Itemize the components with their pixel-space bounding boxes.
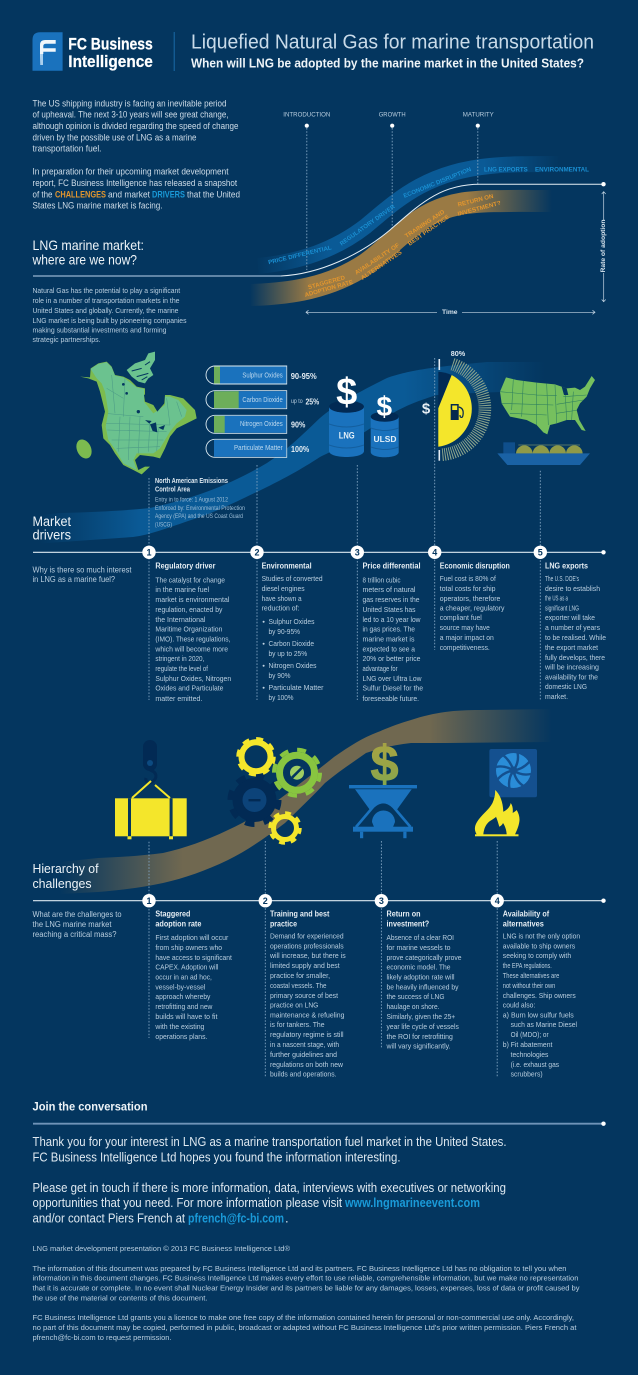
column: training and best practice: limited supply and best: [270, 961, 340, 970]
column: economic disruption: operators, therefore: [440, 594, 500, 603]
column: environmental: by 90%: [268, 671, 291, 680]
column: training and best practice: will increase, but there is: [269, 951, 346, 960]
column: economic disruption: Economic disruption: [440, 562, 510, 570]
intro text: of upheaval. The next 3-10 years will see great change,: [32, 110, 228, 120]
column: regulatory driver: stringent in 2020,: [155, 654, 204, 663]
legal text: [32, 1244, 580, 1342]
emissions control area note: (USCG): [155, 522, 172, 528]
icon: gears: [230, 739, 320, 843]
intro text: report, FC Business Intelligence has released a snapshot: [32, 178, 238, 188]
column: availability of alternatives: LNG is not the only option: [503, 932, 580, 940]
column: LNG exports: LNG exports: [545, 562, 588, 570]
flame: [475, 790, 520, 836]
column: price differential: United States has: [362, 605, 416, 614]
LNG barrel: [329, 372, 364, 457]
column: LNG exports: a number of years: [545, 623, 600, 632]
column: training and best practice: Training and best: [270, 910, 330, 918]
column: environmental: Nitrogen Oxides: [268, 661, 317, 670]
column: staggered adoption rate: First adoption will occur: [155, 933, 229, 942]
column: price differential: meters of natural: [362, 585, 416, 594]
column: return on investment: Return on: [386, 910, 421, 918]
number 1: [142, 894, 156, 907]
intro text: although opinion is divided regarding the speed of change: [32, 121, 238, 131]
column: return on investment: for marine vessels to: [386, 943, 450, 952]
challenge labels: TRAINING AND: [404, 209, 447, 240]
challenges heading: challenges: [32, 876, 92, 891]
column: staggered adoption rate: Staggered: [155, 910, 190, 918]
stage markers: [283, 112, 494, 270]
column: environmental: have shown a: [262, 594, 302, 603]
header: [32, 31, 594, 71]
challenges question: What are the challenges to: [32, 910, 122, 919]
title: Liquefied Natural Gas for marine transportation: [191, 31, 594, 53]
column: training and best practice: maintenance & refueling: [270, 1010, 344, 1020]
column: environmental: diesel engines: [262, 584, 305, 593]
column: staggered adoption rate: [154, 910, 233, 1041]
market drivers question: Why is there so much interest: [32, 564, 132, 574]
column: price differential: Price differential: [362, 562, 420, 570]
column: environmental: by up to 25%: [268, 649, 307, 658]
icon: north america map: [73, 352, 197, 474]
column: LNG exports: fully develops, there: [545, 653, 605, 662]
column: environmental: Sulphur Oxides: [268, 617, 315, 626]
legal text: FC Business Intelligence Ltd grants you a licence to make one free copy of the information contained herein for personal or non-commercial use only. Accordingly,: [32, 1313, 574, 1322]
heading: where are we now: [32, 237, 144, 268]
column: availability of alternatives: [503, 910, 580, 1078]
number 2: 2: [254, 548, 260, 558]
blue drivers band: [258, 164, 560, 266]
column: staggered adoption rate: operations plans.: [155, 1032, 207, 1041]
column: regulatory driver: regulation, enacted by: [155, 605, 223, 614]
column: staggered adoption rate: adoption rate: [155, 920, 202, 928]
ULSD barrel: [371, 391, 399, 457]
hawaii: [73, 437, 95, 461]
market drivers timeline: [33, 358, 606, 700]
thank you text: FC Business Intelligence Ltd hopes you found the information interesting.: [32, 1150, 400, 1164]
column: return on investment: [386, 910, 462, 1050]
bar: nitrogen oxides: Nitrogen Oxides: [240, 421, 283, 428]
challenges band: [60, 709, 553, 894]
column: LNG exports: the US as a: [545, 594, 568, 602]
logo: Intelligence: [68, 52, 153, 71]
column: economic disruption: total costs for ship: [440, 584, 496, 593]
column: staggered adoption rate: have access to significant: [155, 953, 233, 962]
challenges timeline: [33, 841, 606, 1077]
column: training and best practice: practice: [270, 920, 297, 928]
thank you text: [32, 1134, 506, 1226]
column: return on investment: investment?: [386, 920, 429, 928]
column: training and best practice: coastal vessels. The: [270, 981, 326, 990]
challenge labels: ADOPTION RATE: [304, 280, 354, 299]
column: return on investment: haulage on shore.: [386, 1002, 440, 1011]
bar: particulate matter: Particulate Matter: [234, 445, 283, 452]
bar: sulphur oxides: Sulphur Oxides: [242, 372, 283, 380]
driver labels: REGULATORY DRIVER: [339, 204, 397, 247]
column: LNG exports: market.: [545, 692, 568, 701]
column: availability of alternatives: These alternatives are: [503, 971, 559, 980]
column: availability of alternatives: could also:: [503, 1000, 535, 1010]
column: availability of alternatives: available to ship owners: [503, 942, 575, 950]
bar: carbon dioxide: [206, 391, 320, 409]
column: availability of alternatives: challenges. Ship owners: [503, 991, 576, 1000]
intro text: DRIVERS: [152, 189, 185, 199]
column: price differential: expected to see a: [362, 644, 416, 654]
natural gas paragraph: United States and globally. Currently, the marine: [32, 306, 178, 315]
join the conversation heading: [32, 1100, 606, 1126]
column: training and best practice: regulatory regime is still: [270, 1030, 344, 1039]
column: economic disruption: a major impact on: [440, 633, 494, 642]
number 1: 1: [146, 896, 152, 906]
column: environmental: [262, 562, 324, 702]
icon: dollar funnel: [349, 736, 417, 838]
column: price differential: marine market is: [362, 634, 415, 644]
adoption curve chart: [33, 112, 607, 316]
number 3: 3: [355, 548, 360, 558]
column: LNG exports: to be realised. While: [545, 633, 606, 642]
natural gas paragraph: [32, 286, 187, 344]
number 1: [142, 546, 156, 559]
intro text: and market: [108, 189, 150, 199]
column: environmental: by 90-95%: [268, 627, 300, 636]
stage markers: INTRODUCTION: [283, 112, 330, 118]
emissions control area note: Enforced by: Environmental Protection: [155, 505, 245, 512]
thank you text: and/or contact Piers French at: [32, 1210, 185, 1226]
market drivers question: [32, 564, 132, 584]
natural gas paragraph: LNG market is being built by pioneering companies: [32, 316, 187, 325]
column: return on investment: year life cycle of vessels: [386, 1022, 459, 1031]
number 2: [259, 894, 272, 907]
market drivers band: [33, 362, 555, 544]
column: training and best practice: in a nascent stage, with: [270, 1040, 339, 1049]
driver labels: ECONOMIC DISRUPTION: [403, 167, 472, 200]
column: return on investment: prove categorically prove: [386, 953, 462, 962]
column: LNG exports: exporter will take: [545, 613, 595, 622]
intro text: States LNG marine market is facing.: [32, 201, 162, 211]
emissions control area note: Agency (EPA) and the US Coast Guard: [155, 513, 243, 520]
adoption line: [33, 182, 606, 276]
LNG barrel: $: [336, 372, 357, 414]
number 3: [375, 894, 388, 907]
bar: nitrogen oxides: 90%: [291, 420, 306, 430]
icon: dollar funnel: $: [371, 736, 399, 792]
fuel gauge icon: $: [422, 400, 431, 418]
orange challenges band: [250, 201, 552, 295]
number 2: 2: [263, 896, 268, 906]
challenge labels: INVESTMENT?: [457, 200, 502, 218]
heading: where are we now: LNG marine market:: [32, 237, 144, 253]
legal text: no part of this document may be copied, performed in public, broadcast or adapted without FC Business Intelligence Ltd's prior written permission. Piers French at: [32, 1323, 577, 1332]
column: environmental: Studies of converted: [262, 574, 323, 583]
stage markers: GROWTH: [379, 112, 406, 118]
hudson bay and lakes: [122, 383, 165, 432]
challenge labels: ALTERNATIVES: [360, 250, 403, 282]
column: return on investment: be heavily influenced by: [386, 982, 459, 992]
column: environmental: Particulate Matter: [268, 683, 324, 692]
column: price differential: 8 trillion cubic: [362, 576, 401, 584]
column: return on investment: economic model. The: [386, 962, 450, 972]
thank you text: www.lngmarineevent.com: [344, 1195, 480, 1210]
challenges question: [32, 910, 122, 939]
column: training and best practice: primary source of best: [270, 991, 339, 1000]
large yellow gear: [238, 739, 274, 775]
column: regulatory driver: regulate the level of: [155, 664, 209, 673]
column: availability of alternatives: b) Fit abatement: [503, 1040, 553, 1049]
challenge labels: RETURN ON: [457, 194, 494, 209]
column: availability of alternatives: Availability of: [503, 910, 549, 918]
column: regulatory driver: (IMO). These regulations,: [155, 634, 230, 644]
legal text: pfrench@fc-bi.com to request permission.: [32, 1333, 172, 1342]
intro text: of the: [32, 189, 52, 199]
number 4: [428, 546, 441, 559]
number 4: 4: [432, 548, 437, 558]
column: LNG exports: the export market: [545, 643, 599, 652]
challenges heading: Hierarchy of: [32, 861, 99, 876]
emissions bars: [206, 366, 320, 457]
driver labels: ENVIRONMENTAL: [535, 167, 589, 173]
icon: fuel pump: [451, 404, 463, 420]
gauge ticks: [442, 364, 485, 455]
natural gas paragraph: Natural Gas has the potential to play a significant: [32, 286, 181, 295]
emissions control area note: Entry in to force: 1 August 2012: [155, 496, 228, 504]
legal text: information in this document changes. FC Business Intelligence Ltd makes every effort to use reliable, comprehensible information, but we make no representation: [32, 1274, 578, 1282]
column: regulatory driver: in the marine fuel: [155, 585, 209, 594]
column: training and best practice: operations professionals: [270, 942, 344, 950]
column: environmental: Environmental: [262, 562, 312, 570]
dark gear: [230, 776, 278, 824]
column: regulatory driver: [154, 562, 231, 703]
column: price differential: foreseeable future.: [362, 694, 419, 703]
challenges question: the LNG marine market: [32, 920, 112, 929]
number 5: [534, 546, 547, 559]
bar: sulphur oxides: 90-95%: [291, 371, 317, 381]
column: regulatory driver: matter emitted.: [155, 694, 202, 703]
market drivers heading: drivers: [32, 528, 71, 542]
thank you text: Thank you for your interest in LNG as a marine transportation fuel market in the United States.: [32, 1134, 506, 1149]
fuel gauge icon: 80%: [451, 351, 466, 358]
column: training and best practice: further guidelines and: [270, 1050, 337, 1059]
column: availability of alternatives: alternatives: [503, 920, 544, 928]
thank you text: .: [285, 1210, 289, 1226]
number 3: 3: [379, 896, 384, 906]
column: environmental: by 100%: [268, 693, 294, 702]
bar: nitrogen oxides: [206, 415, 306, 433]
intro text: The US shipping industry is facing an inevitable period: [32, 98, 226, 108]
challenges heading: [32, 861, 99, 891]
column: training and best practice: builds and operations.: [270, 1070, 336, 1078]
column: LNG exports: significant LNG: [545, 604, 579, 612]
column: return on investment: likely adoption rate will: [386, 972, 455, 982]
axis: time: Time: [442, 309, 458, 316]
column: return on investment: the ROI for retrofitting: [386, 1032, 453, 1041]
column: regulatory driver: The catalyst for change: [155, 576, 225, 584]
column: price differential: [362, 562, 423, 703]
mainland edge: [80, 362, 197, 474]
column: availability of alternatives: Oil (MDO); or: [511, 1030, 549, 1039]
emissions control area note: North American Emissions: [155, 478, 228, 485]
column: environmental: reduction of:: [262, 604, 299, 612]
small yellow gear: [270, 813, 300, 843]
axis: time: [306, 309, 595, 316]
stage markers: MATURITY: [463, 112, 494, 118]
column: training and best practice: practice for smaller,: [270, 971, 330, 980]
column: regulatory driver: market is environmental: [155, 595, 230, 604]
LNG barrel: LNG: [339, 430, 355, 442]
column: staggered adoption rate: retrofitting and new: [155, 1002, 213, 1011]
ULSD barrel: ULSD: [374, 434, 396, 444]
bar: carbon dioxide: Carbon Dioxide: [242, 397, 283, 404]
green gear: [274, 750, 320, 796]
challenge labels: STAGGERED: [308, 275, 346, 291]
column: LNG exports: The U.S. DOE's: [545, 574, 579, 583]
challenge labels: BEST PRACTICE: [407, 214, 451, 247]
market drivers question: in LNG as a marine fuel?: [32, 574, 115, 584]
intro text: driven by the possible use of LNG as a marine: [32, 132, 196, 142]
legal text: that it is accurate or complete. In no event shall Nuclear Energy Insider and its partners be liable for any damages, losses, expenses, loss of data or profit caused by: [32, 1284, 580, 1292]
natural gas paragraph: role in a number of transportation markets in the: [32, 296, 180, 305]
driver labels: [268, 167, 589, 266]
number 3: [351, 546, 364, 559]
fan: [489, 749, 537, 797]
number 2: [250, 546, 264, 559]
column: training and best practice: [269, 910, 346, 1078]
column: return on investment: Absence of a clear ROI: [386, 933, 454, 942]
intro text: In preparation for their upcoming market development: [32, 167, 229, 177]
fuel gauge icon: [422, 351, 485, 461]
column: economic disruption: Fuel cost is 80% of: [440, 574, 497, 583]
column: environmental: Carbon Dioxide: [268, 639, 314, 648]
column: staggered adoption rate: approach whereby: [155, 992, 211, 1001]
thank you text: opportunities that you need. For more information please visit: [32, 1195, 342, 1210]
column: return on investment: will vary significantly.: [386, 1042, 450, 1050]
bar: carbon dioxide: 25%: [306, 396, 320, 406]
driver labels: PRICE DIFFERENTIAL: [268, 245, 333, 266]
column: regulatory driver: Regulatory driver: [155, 562, 215, 570]
axis: rate of adoption: [600, 192, 607, 302]
column: training and best practice: Demand for experienced: [270, 932, 344, 940]
heading: where are we now: where are we now?: [32, 252, 137, 268]
column: training and best practice: regulations on both new: [270, 1060, 344, 1069]
column: availability of alternatives: the EPA regulations.: [503, 961, 552, 970]
column: availability of alternatives: scrubbers): [511, 1070, 543, 1078]
thank you text: pfrench@fc-bi.com: [188, 1210, 284, 1226]
column: return on investment: the success of LNG: [386, 992, 445, 1001]
number 4: 4: [495, 896, 500, 906]
number 5: 5: [538, 548, 543, 558]
column: availability of alternatives: seeking to comply with: [503, 951, 571, 960]
intro text: transportation fuel.: [32, 144, 102, 154]
bar: sulphur oxides: [206, 366, 317, 384]
column: staggered adoption rate: from ship owners who: [155, 943, 222, 952]
column: availability of alternatives: not without their own: [503, 981, 555, 990]
column: LNG exports: [544, 562, 606, 701]
column: availability of alternatives: such as Marine Diesel: [511, 1020, 577, 1029]
logo: [32, 32, 153, 71]
intro text: CHALLENGES: [55, 189, 106, 199]
column: staggered adoption rate: occur in an ad hoc,: [155, 972, 212, 982]
subtitle: When will LNG be adopted by the marine market in the United States?: [191, 56, 584, 70]
challenges question: reaching a critical mass?: [32, 930, 117, 939]
column: regulatory driver: which will become more: [154, 644, 228, 654]
challenge labels: AVAILABILITY OF: [354, 242, 401, 276]
natural gas paragraph: strategic partnerships.: [32, 335, 100, 344]
arctic islands: [127, 352, 155, 383]
column: LNG exports: domestic LNG: [545, 682, 587, 691]
emissions control area note: [155, 478, 245, 528]
ULSD barrel: $: [377, 391, 393, 422]
column: price differential: gas reserves in the: [362, 595, 420, 604]
bar: particulate matter: 100%: [291, 444, 310, 454]
number 1: 1: [146, 548, 152, 558]
column: economic disruption: a cheaper, regulatory: [440, 604, 505, 612]
column: staggered adoption rate: CAPEX. Adoption will: [155, 962, 219, 972]
bar: particulate matter: [206, 439, 310, 457]
column: availability of alternatives: (i.e. exhaust gas: [511, 1060, 559, 1069]
legal text: the use of the material or contents of this document.: [32, 1294, 208, 1302]
column: training and best practice: practice on LNG: [270, 1000, 319, 1010]
column: price differential: Sulfur Diesel for the: [362, 684, 423, 692]
icon: fan and flame: [475, 749, 537, 836]
column: economic disruption: source may have: [440, 623, 490, 632]
column: regulatory driver: Oxides and Particulate: [155, 684, 223, 692]
column: price differential: 20% or better price: [362, 654, 420, 663]
bar: carbon dioxide: up to: [291, 398, 303, 405]
column: regulatory driver: the International: [155, 615, 206, 624]
join the conversation heading: Join the conversation: [32, 1100, 148, 1114]
column: price differential: in gas prices. The: [362, 624, 415, 634]
column: staggered adoption rate: with the existing: [154, 1022, 204, 1031]
column: training and best practice: is for tankers. The: [270, 1020, 324, 1029]
column: return on investment: Similarly, given the 25+: [386, 1012, 456, 1021]
column: staggered adoption rate: builds will have to fit: [155, 1012, 218, 1021]
thank you text: Please get in touch if there is more information, data, interviews with executives or networking: [32, 1180, 506, 1195]
column: regulatory driver: Maritime Organization: [155, 624, 222, 634]
driver labels: LNG EXPORTS: [484, 167, 528, 173]
logo: FC Business: [68, 34, 153, 54]
icon: crane hook and crate: [115, 740, 187, 839]
hook: [143, 740, 157, 783]
number 4: [490, 894, 504, 907]
market drivers heading: Market: [32, 514, 71, 529]
icon: barrels: [329, 372, 399, 457]
column: economic disruption: compliant fuel: [440, 613, 482, 622]
column: staggered adoption rate: vessel-by-vessel: [155, 982, 206, 992]
column: LNG exports: availability for the: [545, 672, 598, 682]
column: availability of alternatives: technologies: [511, 1050, 549, 1059]
emissions control area note: Control Area: [155, 486, 190, 494]
challenge labels: [304, 194, 502, 299]
natural gas paragraph: making substantial investments and forming: [32, 326, 166, 334]
legal text: The information of this document was prepared by FC Business Intelligence Ltd and its partners. FC Business Intelligence Ltd has no obligation to tell you when: [32, 1264, 566, 1273]
column: LNG exports: desire to establish: [545, 584, 600, 593]
column: regulatory driver: Sulphur Oxides, Nitrogen: [155, 674, 231, 683]
column: LNG exports: will be increasing: [544, 662, 599, 672]
icon: LNG tanker: [497, 442, 590, 465]
intro text: that the United: [187, 189, 240, 199]
axis: rate of adoption: Rate of adoption: [600, 219, 607, 272]
column: price differential: advantage for: [362, 664, 398, 673]
legal text: LNG market development presentation © 2013 FC Business Intelligence Ltd®: [32, 1244, 290, 1253]
market drivers heading: [32, 514, 71, 542]
column: price differential: LNG over Ultra Low: [362, 674, 422, 683]
intro text: [32, 98, 240, 211]
icon: USA map: [500, 376, 595, 434]
column: availability of alternatives: a) Burn low sulfur fuels: [503, 1010, 574, 1020]
column: economic disruption: [440, 562, 510, 652]
column: economic disruption: competitiveness.: [440, 643, 490, 652]
column: price differential: led to a 10 year low: [362, 615, 421, 624]
